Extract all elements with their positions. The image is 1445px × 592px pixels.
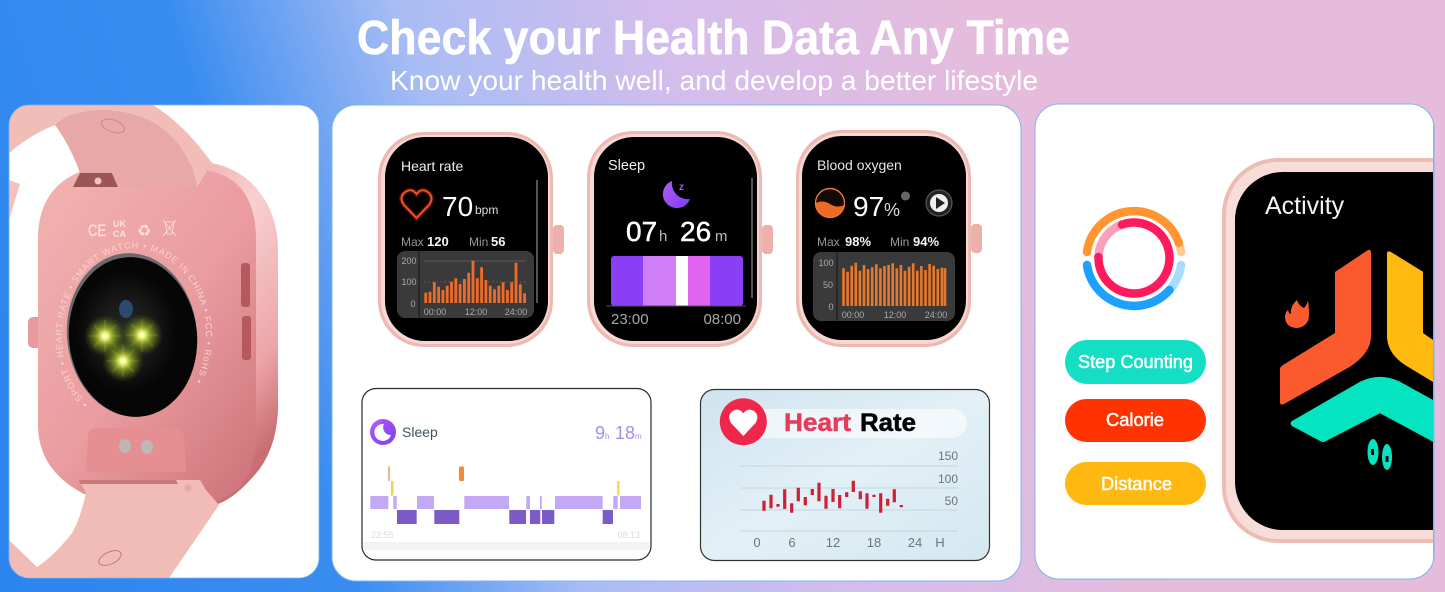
heart sensor	[66, 253, 198, 417]
pill: step counting	[1065, 340, 1206, 384]
watch: sleep: Sleep	[608, 158, 645, 174]
watch: sleep: 26	[680, 216, 711, 247]
watch: heart rate: Max	[401, 235, 424, 249]
sleep duration	[595, 423, 642, 443]
watch: sleep: 08:00	[703, 311, 741, 328]
blood oxygen chart: 100	[818, 258, 834, 268]
pill: distance	[1065, 462, 1206, 505]
card: heart rate graph: Rate	[860, 409, 916, 437]
icon: oxygen gauge	[814, 188, 846, 220]
activity segment: distance	[1387, 251, 1433, 382]
blood oxygen chart: 50	[823, 280, 833, 290]
certification marks: ♻	[137, 223, 151, 240]
charging contacts	[86, 428, 186, 472]
pill: calorie: Calorie	[1106, 410, 1164, 430]
panel: activity	[1035, 104, 1445, 579]
icon: footprints	[1368, 439, 1392, 470]
card: heart rate graph: 100	[938, 472, 958, 486]
watch back face	[38, 170, 256, 501]
card: sleep graph: 22:55	[371, 530, 394, 540]
watch: blood oxygen: 98%	[845, 234, 871, 249]
blood oxygen chart: 0	[828, 302, 834, 312]
sleep duration: m	[635, 432, 642, 441]
watch: heart rate: Min	[469, 235, 488, 249]
icon: heart badge	[720, 398, 767, 445]
heart rate chart: 100	[401, 277, 417, 287]
watch: blood oxygen	[796, 130, 982, 347]
sleep stage bar	[606, 256, 746, 306]
heart rate chart: 200	[401, 256, 417, 266]
blood oxygen chart: 00:00	[842, 310, 864, 320]
watch: sleep: 23:00	[611, 311, 649, 328]
heart rate chart: 12:00	[465, 307, 487, 317]
large activity watch: Activity	[1265, 192, 1345, 220]
card: heart rate graph: H	[935, 535, 945, 550]
icon: heart outline	[402, 190, 432, 218]
card: heart rate graph: 6	[788, 535, 796, 550]
watch: heart rate	[378, 132, 564, 347]
icon: moon: z	[679, 182, 684, 193]
heart rate chart: 0	[410, 299, 416, 309]
title: Check your Health Data Any Time	[357, 12, 1070, 65]
watch: heart rate: bpm	[475, 203, 498, 217]
certification marks	[88, 220, 176, 237]
panel: health screens	[332, 105, 1021, 581]
panel: watch back	[9, 105, 319, 578]
sensor light rays	[89, 319, 158, 377]
sleep duration: 9	[595, 423, 605, 443]
card: heart rate graph: 24	[908, 535, 922, 550]
certification marks: UK	[113, 219, 126, 229]
watch: heart rate: 120	[427, 234, 449, 249]
heart rate chart	[397, 251, 534, 318]
icon: activity rings	[1087, 211, 1181, 306]
watch: heart rate: 70	[442, 191, 473, 222]
watch: blood oxygen: Max	[817, 235, 840, 249]
far strap fragment	[9, 180, 20, 220]
watch: heart rate: 56	[491, 234, 505, 249]
heart rate bars	[764, 481, 901, 513]
blood oxygen chart: 12:00	[884, 310, 906, 320]
activity segment: calorie	[1280, 250, 1371, 405]
subtitle: Know your health well, and develop a better lifestyle	[390, 65, 1038, 96]
card: heart rate graph: 18	[867, 535, 881, 550]
card: sleep graph	[362, 388, 651, 560]
card: heart rate graph: 0	[753, 535, 761, 550]
watch: blood oxygen: Min	[890, 235, 909, 249]
large activity watch	[1222, 158, 1445, 543]
card: heart rate graph: 50	[945, 494, 958, 508]
engraved ring text: • SPORT • HEART RATE • SMART WATCH • MADE IN CHINA • FCC • RoHS •	[56, 242, 212, 406]
watch: heart rate: Heart rate	[401, 158, 463, 174]
icon: play button	[926, 190, 952, 216]
watch: blood oxygen: 94%	[913, 234, 939, 249]
strap slot and pin top	[73, 173, 118, 187]
card: heart rate graph	[700, 390, 990, 560]
blood oxygen chart	[813, 252, 955, 321]
pill: distance: Distance	[1101, 474, 1172, 494]
watch: sleep	[587, 131, 773, 347]
watch side shell	[208, 163, 278, 504]
side buttons	[241, 263, 251, 360]
watch strap top	[9, 105, 212, 187]
card: heart rate graph: Heart	[784, 409, 852, 437]
sleep duration: 18	[615, 423, 635, 443]
icon: sleep badge	[370, 419, 396, 445]
pill: step counting: Step Counting	[1078, 352, 1193, 372]
card: heart rate graph: 150	[938, 449, 958, 463]
icon: moon	[663, 181, 690, 208]
activity segment: steps	[1290, 377, 1433, 442]
watch: blood oxygen: 97	[853, 191, 884, 222]
certification marks: CA	[113, 229, 126, 239]
heart rate chart: 24:00	[505, 307, 527, 317]
watch: blood oxygen: %	[884, 200, 900, 220]
watch: sleep: 07	[626, 216, 657, 247]
pill: calorie	[1065, 399, 1206, 442]
panel border: right	[1035, 104, 1434, 579]
watch: blood oxygen: Blood oxygen	[817, 157, 902, 173]
card: sleep graph: 08:13	[617, 530, 640, 540]
icon: flame	[1285, 300, 1309, 328]
blood oxygen chart: 24:00	[925, 310, 947, 320]
heart rate chart: 00:00	[424, 307, 446, 317]
watch strap bottom	[9, 480, 219, 578]
card: sleep graph: Sleep	[402, 424, 438, 440]
panel border: left	[9, 105, 319, 578]
sleep timeline	[370, 466, 641, 524]
card: heart rate graph: 12	[826, 535, 840, 550]
left crown	[28, 317, 38, 348]
certification marks: CE	[88, 221, 106, 240]
watch: sleep: h	[659, 228, 667, 245]
watch: sleep: m	[715, 228, 728, 245]
sleep duration: h	[605, 432, 609, 441]
